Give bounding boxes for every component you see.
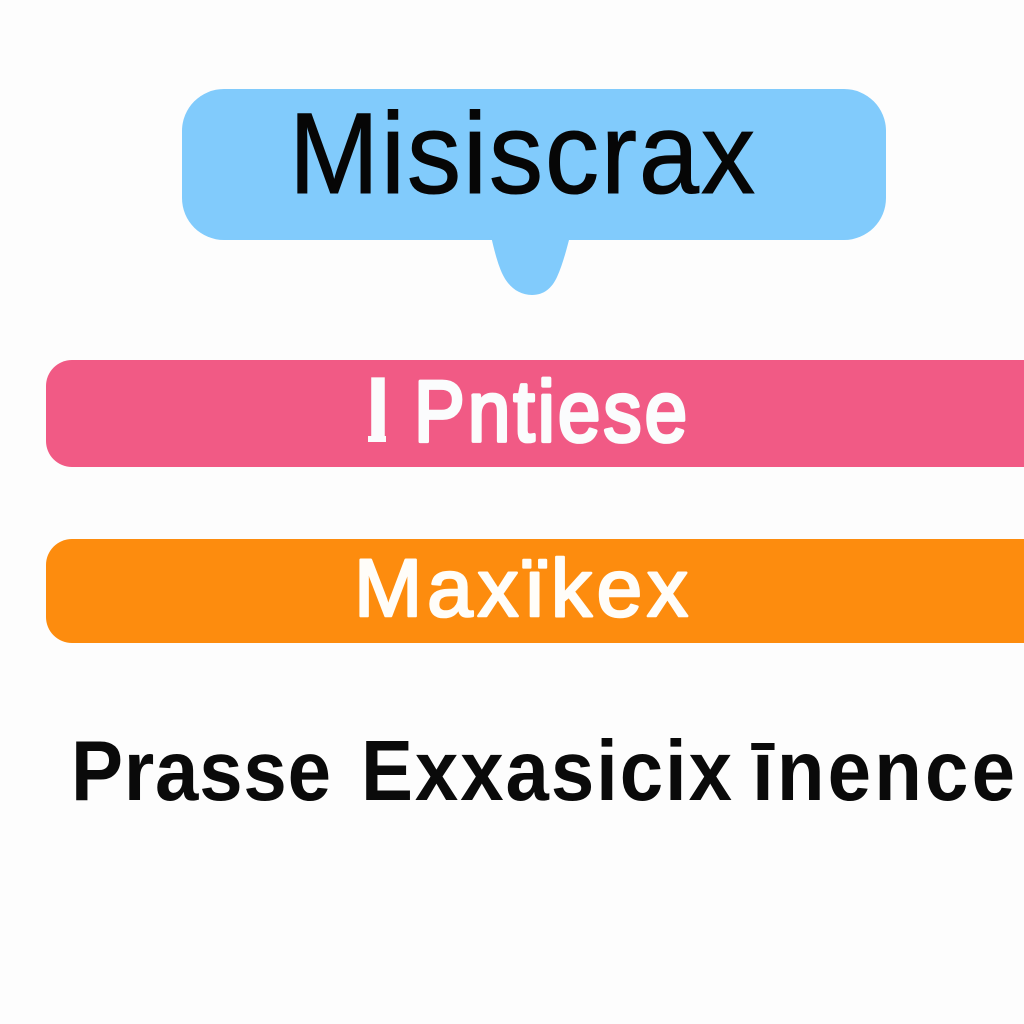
pink bar label: I [365, 357, 391, 462]
bubble body [182, 89, 886, 240]
panel: pink bar [46, 357, 1024, 467]
footer text: Prasse [71, 724, 331, 819]
footer text: Exxasicix [361, 724, 732, 819]
callout: speech bubble [182, 89, 886, 295]
bubble tail [491, 236, 570, 295]
orange bar label: Maxïkex [354, 543, 688, 634]
footer text: īnence [751, 724, 1015, 819]
bubble title: Misiscrax [289, 89, 755, 218]
pink bar shape [46, 360, 1024, 467]
pink bar label: Pntiese [414, 365, 687, 460]
footer text [71, 724, 1015, 819]
panel: orange bar [46, 539, 1024, 643]
orange bar shape [46, 539, 1024, 643]
